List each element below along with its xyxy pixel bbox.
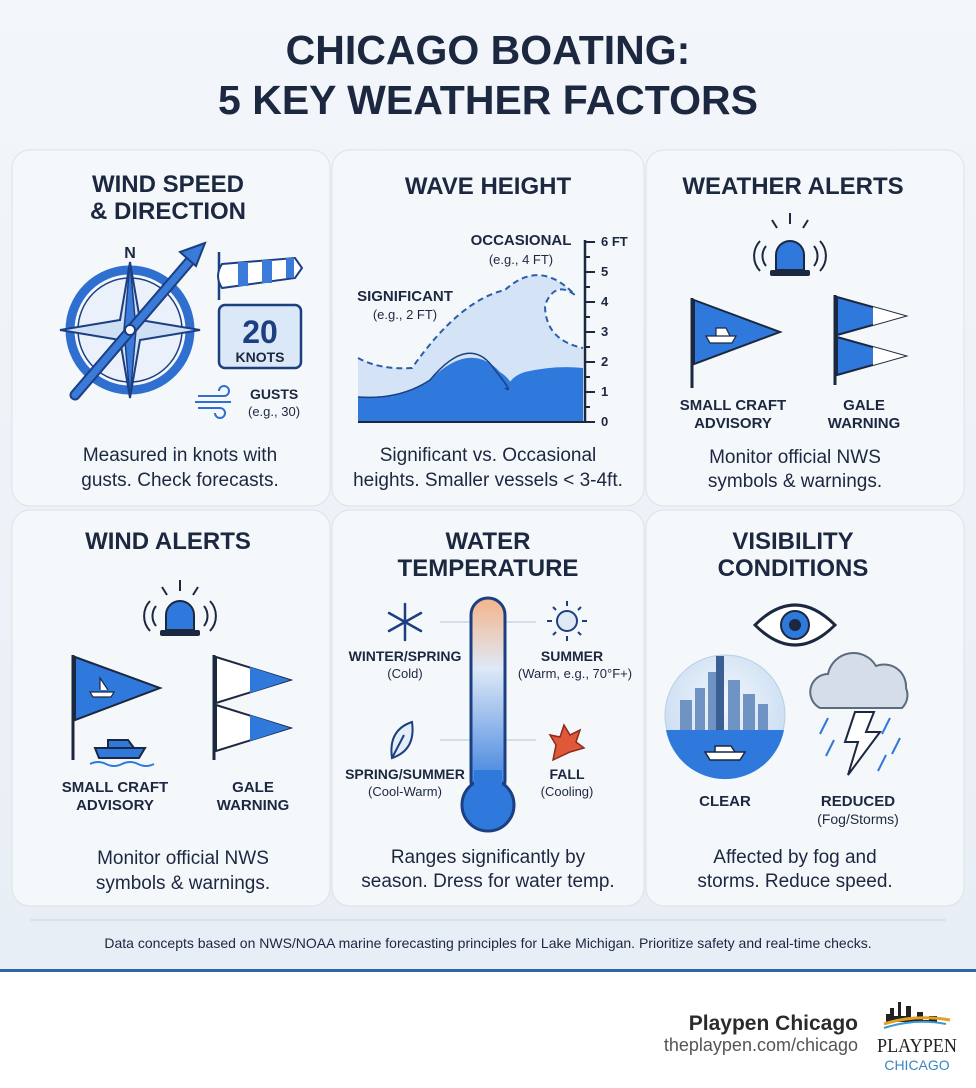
icon: siren [754,213,826,276]
gusts: GUSTS [250,386,298,402]
heading: water temperature [398,528,578,582]
label: summer: (Warm, e.g., 70°F+) [518,666,632,681]
text: wind alerts description: Monitor official NWS [97,848,269,869]
panel: water temperature [332,510,644,906]
panel: weather alerts [646,150,964,506]
text: visibility description: Affected by fog and [713,847,877,868]
axis: height scale: 2 [601,354,608,369]
icon: eye [755,605,835,645]
label: fall [541,766,593,799]
label: significant: (e.g., 2 FT) [373,307,437,322]
labels: wind alert flags: SMALL CRAFT [62,779,168,796]
text: wind alerts description: symbols & warnings. [96,873,270,894]
footnote: Data concepts based on NWS/NOAA marine forecasting principles for Lake Michigan. Prioritize safety and real-time checks. [104,935,872,951]
label: fall: (Cooling) [541,784,593,799]
logo: PLAYPEN [877,1035,957,1057]
text: weather alerts description: symbols & warnings. [708,471,882,492]
panel: wind speed & direction [12,150,330,506]
label: significant: SIGNIFICANT [357,288,453,305]
label: spring/summer [345,766,465,799]
text: weather alerts description: Monitor official NWS [709,447,881,468]
text: temperature description: Ranges significantly by [391,847,586,868]
text: visibility description [697,847,893,892]
label: significant [357,288,453,322]
title [218,27,758,123]
heading: wind speed: & DIRECTION [90,198,246,225]
knots display [219,305,301,368]
heading: visibility: CONDITIONS [718,555,868,582]
title: CHICAGO BOATING: [286,27,690,73]
footer: brand [664,1012,858,1055]
labels: clear/reduced: REDUCED [821,793,895,810]
label: spring/summer: SPRING/SUMMER [345,766,465,782]
icon: small craft flag [692,298,780,388]
text: visibility description: storms. Reduce speed. [697,871,893,892]
heading: weather alerts: WEATHER ALERTS [682,173,904,200]
knots display: 20 [242,314,278,350]
icon: compass: N [124,245,136,262]
heading: wave height: WAVE HEIGHT [405,173,571,200]
label: winter/spring: WINTER/SPRING [349,648,461,664]
labels: clear/reduced: (Fog/Storms) [817,811,899,827]
icon: sun [547,601,587,641]
labels: alert flags: SMALL CRAFT [680,397,786,414]
icon: compass [60,243,205,398]
gusts [195,386,300,419]
icon: siren [144,580,216,636]
labels: wind alert flags: GALE [232,779,274,796]
heading: wind alerts: WIND ALERTS [85,528,251,555]
axis: height scale [585,234,628,429]
gusts: (e.g., 30) [248,404,300,419]
label: summer: SUMMER [541,648,603,664]
heading: water temperature: WATER [446,528,530,555]
text: wind description: Measured in knots with [83,445,277,466]
footer: brand: theplaypen.com/chicago [664,1035,858,1055]
label: occasional: (e.g., 4 FT) [489,252,553,267]
label: occasional [471,232,571,267]
labels: alert flags: ADVISORY [694,415,772,432]
text: wave description [353,445,623,491]
labels: wind alert flags: WARNING [217,797,289,814]
axis: height scale: 4 [601,294,609,309]
text: temperature description [361,847,615,892]
labels: clear/reduced [699,793,899,827]
labels: alert flags: WARNING [828,415,900,432]
knots display: KNOTS [236,349,284,365]
label: fall: FALL [550,766,585,782]
axis: height scale: 3 [601,324,608,339]
label: summer [518,648,632,681]
text: wave description: Significant vs. Occasional [380,445,596,466]
icon: gale flags [835,295,905,385]
icon: small craft flag with boat [73,655,160,766]
logo: CHICAGO [884,1057,950,1073]
labels: alert flags [680,397,900,432]
logo [877,1002,957,1073]
icon: storm cloud [810,653,907,775]
panel: wave height [332,150,644,506]
heading: wind speed: WIND SPEED [92,171,244,198]
axis: height scale: 5 [601,264,608,279]
axis: height scale: 6 FT [601,234,628,249]
text: temperature description: season. Dress for water temp. [361,871,615,892]
icon: clear city [665,655,785,779]
axis: height scale: 0 [601,414,608,429]
icon: thermometer [440,598,536,831]
heading: visibility [718,528,868,582]
text: wind description: gusts. Check forecasts. [81,470,279,491]
label: winter/spring [349,648,461,681]
text: wind alerts description [96,848,270,894]
labels: alert flags: GALE [843,397,885,414]
panel: wind alerts [12,510,330,906]
panel: visibility conditions [646,510,964,906]
icon: leaf [391,722,413,758]
text: weather alerts description [708,447,882,492]
labels: wind alert flags [62,779,289,814]
text: wave description: heights. Smaller vessels < 3-4ft. [353,470,623,491]
chart: wave [358,275,586,422]
icon: autumn leaf [550,725,584,760]
footer: brand: Playpen Chicago [689,1012,858,1035]
text: wind description [81,445,279,491]
label: spring/summer: (Cool-Warm) [368,784,442,799]
icon: windsock [218,252,302,300]
icon: snowflake [389,604,421,640]
heading: visibility: VISIBILITY [732,528,854,555]
axis: height scale: 1 [601,384,608,399]
title: 5 KEY WEATHER FACTORS [218,77,758,123]
label: occasional: OCCASIONAL [471,232,571,249]
labels: wind alert flags: ADVISORY [76,797,154,814]
label: winter/spring: (Cold) [387,666,423,681]
icon: gale flags [214,655,290,760]
labels: clear/reduced: CLEAR [699,793,751,810]
heading: wind speed [90,171,246,225]
heading: water temperature: TEMPERATURE [398,555,578,582]
